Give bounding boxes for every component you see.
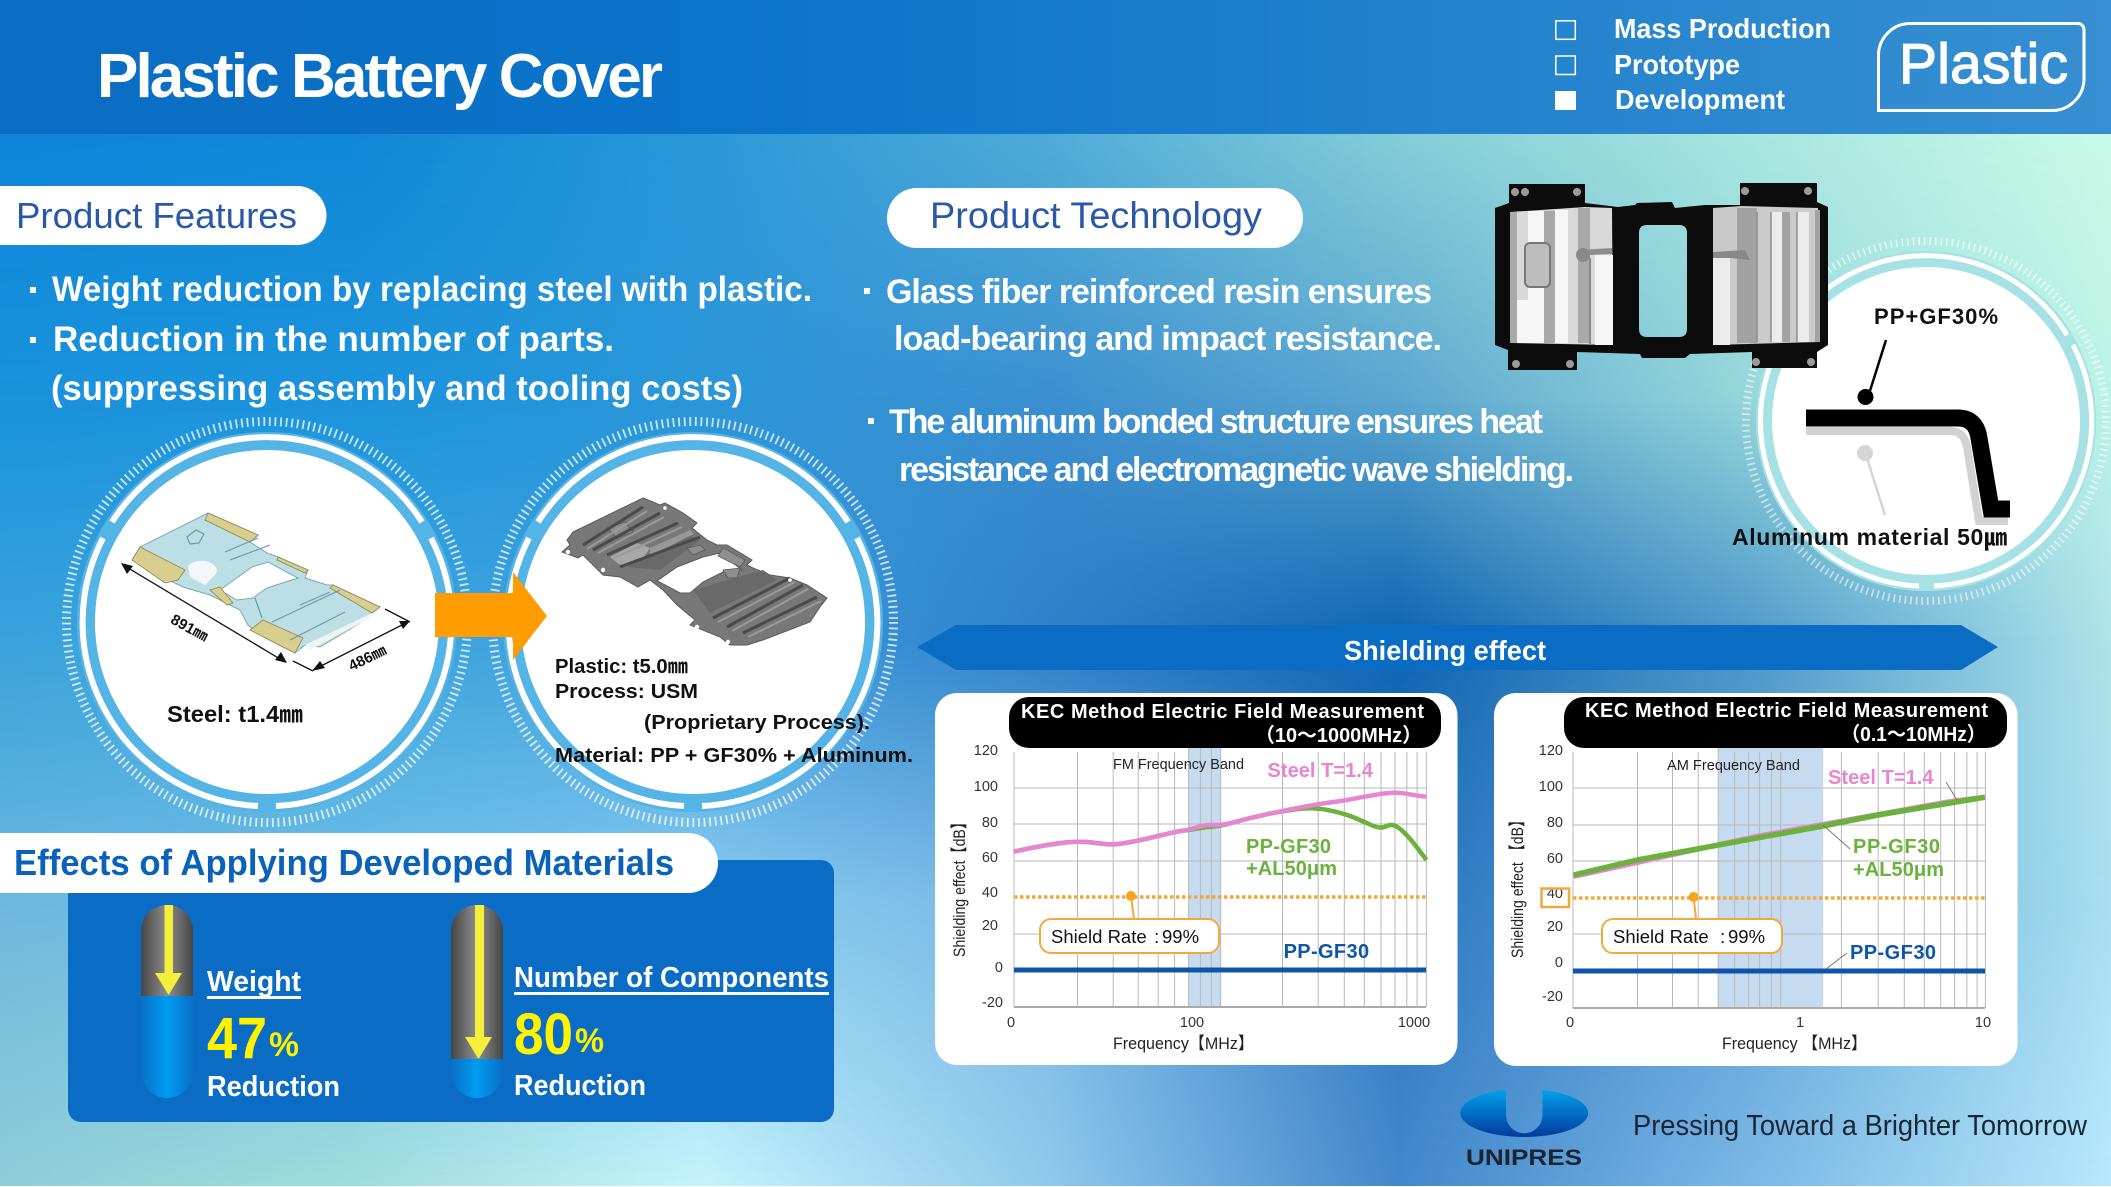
panel: chart 10-1000 MHz — [935, 693, 1458, 1065]
gauge: number of components: % — [575, 1022, 604, 1060]
callout: shield rate: : — [1715, 926, 1730, 947]
line chart: FM band: PP-GF30 — [1246, 836, 1331, 858]
callout: shield rate: Shield Rate — [1613, 926, 1709, 947]
y tick labels: 40 — [982, 885, 998, 901]
x tick labels: 0 — [1566, 1015, 1574, 1031]
plastic specification text: Process: USM — [555, 681, 698, 703]
aluminum callout: Aluminum material 50㎛ — [1732, 524, 2007, 551]
x tick labels: 1 — [1796, 1015, 1804, 1031]
y tick labels: 120 — [974, 743, 998, 759]
cross-section: PP+GF30 layer — [1806, 418, 2010, 509]
heading pill: effects — [0, 833, 834, 1122]
plastic specification text — [555, 656, 913, 767]
right silver panel — [1713, 206, 1820, 345]
y tick labels: 0 — [995, 960, 1003, 976]
plastic specification text: Material: PP + GF30% + Aluminum. — [555, 745, 913, 767]
text block: product technology bullets: The aluminum bonded structure ensures heat — [889, 403, 1543, 441]
left silver panel — [1510, 207, 1613, 345]
x tick labels: 0 — [1007, 1015, 1015, 1031]
heading pill: effects: Effects of Applying Developed Materials — [14, 842, 674, 883]
text block: product technology bullets: load-bearing and impact resistance. — [894, 320, 1442, 358]
plastic specification text: (Proprietary Process). — [644, 712, 870, 734]
line chart: AM band: PP-GF30 — [1850, 942, 1936, 964]
callout: shield rate: 99% — [1162, 926, 1199, 947]
mounting holes — [1511, 187, 1815, 368]
y tick labels: 80 — [1547, 815, 1563, 831]
gauge: number of components: 80 — [514, 1002, 573, 1067]
x tick labels: 1000 — [1398, 1015, 1430, 1031]
y tick labels: -20 — [1542, 989, 1563, 1005]
development stage checklist: Mass Production — [1614, 13, 1831, 44]
x tick labels: 100 — [1180, 1015, 1204, 1031]
chart title: KEC Method Electric Field Measurement — [1585, 700, 1988, 722]
chart title: （0.1～10MHz） — [1841, 723, 1986, 746]
development stage checklist — [1555, 13, 1831, 115]
y tick labels — [1539, 743, 1563, 1005]
plastic part drawing — [562, 498, 827, 645]
y tick labels: 120 — [1539, 743, 1563, 759]
dimension arrows: 486㎜ — [346, 642, 389, 675]
steel label: Steel: t1.4㎜ — [167, 701, 303, 727]
chart title: KEC Method Electric Field Measurement — [1021, 701, 1424, 723]
line chart: FM band: Frequency【MHz】 — [1113, 1034, 1254, 1053]
header band — [0, 0, 2111, 134]
callout: shield rate: Shield Rate — [1051, 926, 1147, 947]
PP+GF30 callout — [1858, 304, 1998, 405]
line chart: FM band: FM Frequency Band — [1113, 756, 1244, 773]
chart title: （10～1000MHz） — [1255, 724, 1422, 747]
line chart: AM band: AM Frequency Band — [1667, 757, 1800, 774]
gauge: weight: % — [269, 1026, 299, 1064]
panel: plastic part circle — [492, 422, 913, 822]
line chart: FM band: +AL50μm — [1246, 858, 1337, 880]
y tick labels: 100 — [974, 779, 998, 795]
dimension arrows — [121, 563, 410, 675]
text block: product technology bullets: resistance and electromagnetic wave shielding. — [899, 451, 1574, 489]
aluminum callout — [1732, 445, 2007, 551]
logo: Unipres: UNIPRES — [1466, 1145, 1582, 1170]
development stage checklist: Prototype — [1614, 49, 1740, 80]
cross-section: aluminum layer — [1806, 431, 2008, 521]
banner: shielding effect: Shielding effect — [1344, 635, 1546, 666]
heading pill: product technology: Product Technology — [930, 195, 1263, 236]
line chart: AM band: Frequency 【MHz】 — [1722, 1034, 1867, 1053]
line chart: FM band — [950, 743, 1430, 1053]
y tick labels: 0 — [1555, 955, 1563, 971]
y tick labels: -20 — [982, 995, 1003, 1011]
x tick labels — [1566, 1015, 1991, 1031]
line chart: AM band: Shielding effect 【dB】 — [1508, 813, 1527, 958]
heading pill: product features: Product Features — [16, 195, 297, 236]
text block: product features bullets: (suppressing assembly and tooling costs) — [51, 369, 743, 408]
steel part drawing — [132, 513, 380, 653]
highlight box: 40 dB — [1542, 888, 1569, 907]
line chart: FM band: PP-GF30 — [1284, 941, 1369, 963]
line chart: AM band: PP-GF30 — [1853, 836, 1940, 858]
x tick labels — [1007, 1015, 1430, 1031]
y tick labels: 100 — [1539, 779, 1563, 795]
gauge: weight: Weight — [207, 966, 301, 998]
y tick labels: 80 — [982, 815, 998, 831]
chart title — [1564, 697, 2007, 748]
y tick labels: 60 — [1547, 851, 1563, 867]
y tick labels: 20 — [982, 918, 998, 934]
gauge: number of components: Reduction — [514, 1070, 646, 1102]
line chart: AM band — [1508, 743, 1991, 1053]
y tick labels: 40 — [1547, 886, 1563, 902]
heading pill: product features — [0, 186, 326, 245]
plastic specification text: Plastic: t5.0㎜ — [555, 656, 688, 678]
panel: steel part circle — [66, 422, 468, 822]
y tick labels: 60 — [982, 850, 998, 866]
y tick labels — [974, 743, 1003, 1011]
callout: shield rate — [1602, 892, 1782, 953]
text block: product features bullets: Weight reduction by replacing steel with plastic. — [52, 270, 812, 309]
line chart: FM band: Shielding effect【dB】 — [950, 815, 969, 957]
gauge: weight — [141, 905, 340, 1103]
gauge: number of components — [451, 905, 829, 1102]
callout: shield rate: : — [1149, 926, 1164, 947]
tagline: Pressing Toward a Brighter Tomorrow — [1633, 1110, 2088, 1142]
panel: cross-section circle — [1732, 241, 2106, 601]
callout: shield rate — [1040, 891, 1219, 953]
heading pill: product technology — [887, 188, 1303, 248]
text block: product technology bullets: Glass fiber reinforced resin ensures — [886, 273, 1432, 311]
line chart: AM band: +AL50μm — [1853, 859, 1944, 881]
chart title — [1009, 697, 1441, 748]
line chart: AM band: Steel T=1.4 — [1828, 767, 1934, 789]
panel: effects background — [68, 860, 834, 1122]
development stage checklist: Development — [1615, 84, 1785, 115]
photo: plastic battery cover — [1495, 183, 1828, 370]
plastic badge — [1878, 24, 2084, 111]
arrow: steel to plastic — [435, 572, 547, 660]
y tick labels: 20 — [1547, 919, 1563, 935]
x tick labels: 10 — [1975, 1015, 1991, 1031]
gauge: number of components: Number of Components — [514, 962, 829, 994]
banner: shielding effect — [917, 625, 1998, 670]
text block: product technology bullets — [864, 273, 1574, 489]
dimension arrows: 891㎜ — [168, 611, 211, 645]
line chart: FM band: Steel T=1.4 — [1268, 760, 1374, 782]
callout: shield rate: 99% — [1728, 926, 1765, 947]
text block: product features bullets: Reduction in the number of parts. — [53, 320, 614, 359]
logo: Unipres — [1460, 1089, 1588, 1170]
plastic badge: Plastic — [1899, 32, 2068, 96]
PP+GF30 callout: PP+GF30% — [1874, 304, 1998, 329]
title: Plastic Battery Cover — [97, 42, 663, 111]
panel: chart 0.1-10 MHz — [1494, 693, 2018, 1066]
gauge: weight: 47 — [207, 1006, 267, 1071]
text block: product features bullets — [30, 270, 812, 408]
gauge: weight: Reduction — [207, 1071, 340, 1103]
